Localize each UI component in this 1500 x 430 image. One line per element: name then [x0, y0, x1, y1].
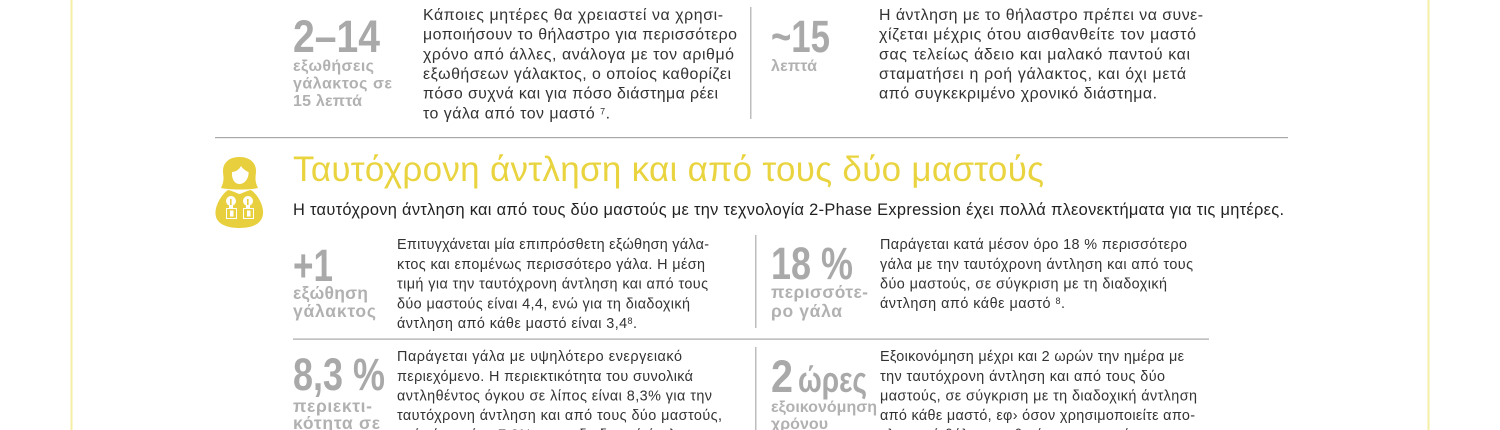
text block: additional ejection	[397, 237, 709, 332]
text block: pumping until empty: από συγκεκριμένο χρονικό διάστημα.	[879, 86, 1157, 103]
text block: additional ejection: 8	[628, 316, 633, 326]
text block: expressions explanation: μοποιήσουν το θήλαστρο για περισσότερο	[423, 27, 737, 44]
text block: more milk: Παράγεται κατά μέσον όρο 18 % περισσότερο	[880, 237, 1187, 253]
text block: pumping until empty: Η άντληση με το θήλαστρο πρέπει να συνε-	[879, 7, 1203, 24]
text block: higher energy milk: Παράγεται γάλα με υψηλότερο ενεργειακό	[397, 349, 682, 365]
stat: 2 hours saved	[771, 351, 877, 430]
intro text: Η ταυτόχρονη άντληση και από τους δύο μαστούς με την τεχνολογία 2-Phase Expression έχει πολλά πλεονεκτήματα για τις μητέρες.	[293, 201, 1284, 219]
stat: +1 milk ejection	[293, 240, 376, 321]
stat: 18% more milk: 18 %	[771, 238, 853, 289]
text block: time saving: Εξοικονόμηση μέχρι και 2 ωρών την ημέρα με	[880, 349, 1185, 365]
stat: 8.3% fat content	[293, 349, 385, 430]
text block: expressions explanation: 7	[600, 106, 605, 116]
text block: expressions explanation: πόσο συχνά και για πόσο διάστημα ρέει	[423, 86, 718, 103]
text block: more milk: δύο μαστούς, σε σύγκριση με τη διαδοχική	[880, 276, 1167, 292]
stat: 2 hours saved: εξοικονόμηση	[771, 399, 877, 416]
stat: 2–14 expressions: 2–14	[293, 11, 380, 62]
text block: expressions explanation	[423, 7, 737, 122]
text block: expressions explanation: το γάλα από τον μαστό	[423, 105, 595, 122]
text block: additional ejection: .	[633, 316, 637, 332]
text block: higher energy milk: ταυτόχρονη άντληση και από τους δύο μαστούς,	[397, 408, 722, 424]
panel: top pumping duration	[293, 7, 1203, 122]
stat: 2–14 expressions	[293, 11, 392, 110]
stat: 2–14 expressions: γάλακτος σε	[293, 76, 392, 92]
stat: 18% more milk	[771, 238, 868, 321]
stat: +1 milk ejection: γάλακτος	[293, 301, 376, 321]
text block: time saving: μαστούς, σε σύγκριση με τη διαδοχική άντληση	[880, 388, 1197, 404]
stat: 2 hours saved: ώρες	[798, 359, 867, 400]
text block: time saving	[880, 349, 1197, 430]
text block: pumping until empty: σταματήσει η ροή γάλακτος, και όχι μετά	[879, 66, 1186, 83]
text block: time saving: από κάθε μαστό, εφ› όσον χρησιμοποιείτε απο-	[880, 408, 1195, 424]
stat: ~15 minutes: λεπτά	[771, 58, 817, 75]
text block: expressions explanation: Κάποιες μητέρες θα χρειαστεί να χρησι-	[423, 7, 723, 24]
stat: 2–14 expressions: εξωθήσεις	[293, 58, 374, 75]
panel: double pumping benefits	[293, 235, 1209, 430]
stat: 8.3% fat content: περιεκτι-	[293, 396, 372, 416]
text block: time saving: την ταυτόχρονη άντληση και από τους δύο	[880, 369, 1165, 385]
text block: higher energy milk: αντληθέντος όγκου σε λίπος είναι 8,3% για την	[397, 388, 712, 404]
text block: additional ejection: δύο μαστούς είναι 4,4, ενώ για τη διαδοχική	[397, 296, 690, 312]
stat: 2–14 expressions: 15 λεπτά	[293, 93, 362, 110]
heading: double pumping: Ταυτόχρονη άντληση και από τους δύο μαστούς	[293, 150, 1044, 189]
text block: higher energy milk: περιεχόμενο. Η περιεκτικότητα του συνολικά	[397, 369, 693, 385]
text block: expressions explanation: χρόνο από άλλες, ανάλογα με τον αριθμό	[423, 46, 734, 63]
text block: more milk	[880, 237, 1193, 312]
text block: pumping until empty: χίζεται μέχρις ότου αισθανθείτε τον μαστό	[879, 27, 1196, 44]
text block: more milk: .	[1061, 296, 1065, 312]
text block: additional ejection: κτος και επομένως περισσότερο γάλα. Η μέση	[397, 257, 705, 273]
text block: more milk: γάλα με την ταυτόχρονη άντληση και από τους	[880, 257, 1193, 273]
stat: 18% more milk: περισσότε-	[771, 282, 868, 302]
text block: pumping until empty: σας τελείως άδειο και μαλακό παντού και	[879, 46, 1190, 63]
text block: more milk: άντληση από κάθε μαστό	[880, 296, 1051, 312]
stat: +1 milk ejection: +1	[293, 240, 333, 291]
text block: more milk: 8	[1056, 296, 1061, 306]
stat: +1 milk ejection: εξώθηση	[293, 283, 368, 304]
text block: pumping until empty	[879, 7, 1203, 103]
stat: ~15 minutes	[771, 11, 830, 75]
text block: additional ejection: τιμή για την ταυτόχρονη άντληση και από τους	[397, 276, 708, 292]
stat: 2 hours saved: 2	[771, 351, 793, 402]
icon: mother with double pump	[215, 157, 263, 228]
stat: ~15 minutes: ~15	[771, 11, 830, 62]
text block: additional ejection: Επιτυγχάνεται μία επιπρόσθετη εξώθηση γάλα-	[397, 237, 709, 253]
text block: higher energy milk	[397, 349, 722, 430]
text block: additional ejection: άντληση από κάθε μαστό είναι 3,4	[397, 316, 627, 332]
text block: expressions explanation: εξωθήσεων γάλακτος, ο οποίος καθορίζει	[423, 66, 731, 83]
text block: expressions explanation: .	[606, 105, 610, 122]
stat: 8.3% fat content: 8,3 %	[293, 349, 385, 400]
stat: 18% more milk: ρο γάλα	[771, 301, 842, 321]
